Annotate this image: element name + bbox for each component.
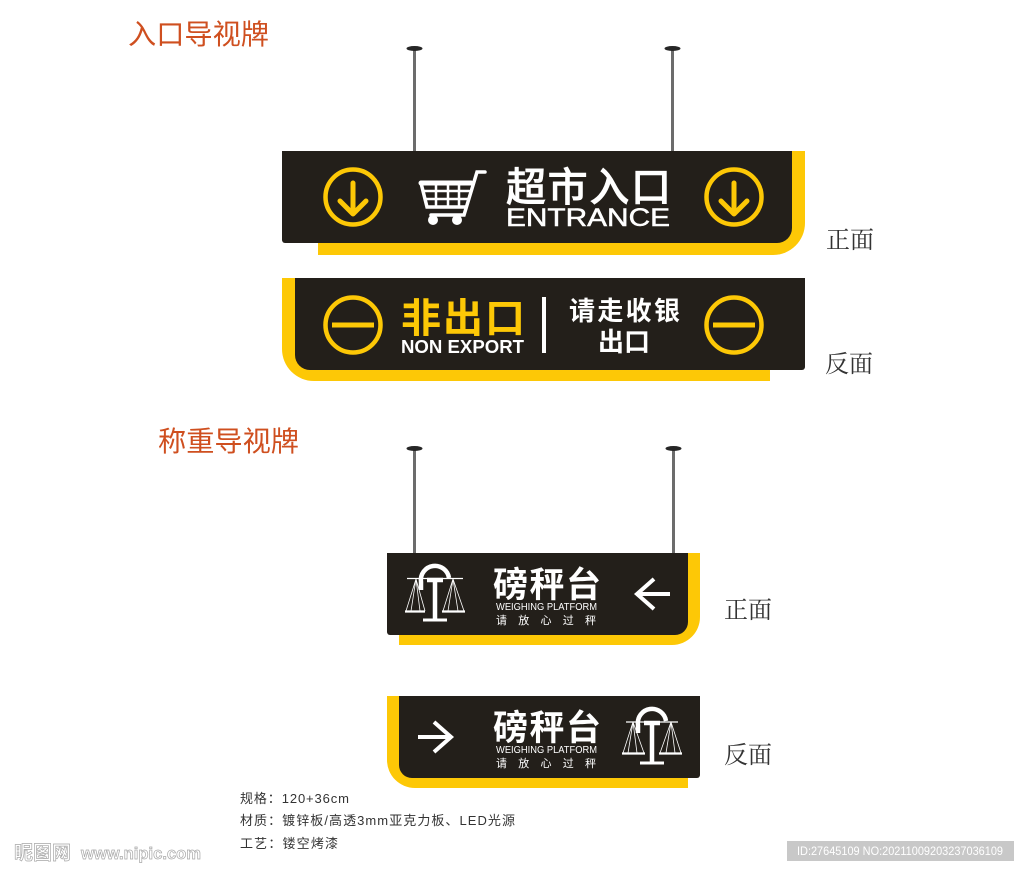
icon: down arrow circle right (706, 170, 762, 224)
icon: balance scale (405, 566, 465, 620)
icon: left arrow (637, 579, 670, 609)
panel: entrance sign front (282, 151, 805, 255)
watermark: image id bar: ID:27645109 NO:20211009203237036109 (797, 846, 1003, 858)
heading: weighing signs: 称重导视牌 (158, 420, 299, 460)
specification text: 材质：镀锌板/高透3mm亚克力板、LED光源 (240, 813, 515, 828)
icon: no entry circle left (326, 298, 380, 352)
specification text: 工艺：镂空烤漆 (240, 836, 338, 851)
watermark: site name: 昵图网 (14, 838, 71, 865)
icon: balance scale (622, 709, 682, 763)
watermark: site name: www.nipic.com (80, 845, 201, 863)
icon: shopping cart (421, 172, 485, 225)
panel: weighing sign front (387, 553, 700, 645)
hanging pole right, weighing sign (666, 446, 682, 553)
icon: down arrow circle left (326, 170, 380, 224)
instruction text: 请走收银 (569, 291, 680, 328)
icon: no entry circle right (706, 298, 762, 352)
specification text: 规格：120+36cm (240, 791, 349, 806)
hanging pole left, weighing sign (406, 446, 422, 553)
watermark: image id bar (787, 841, 1014, 861)
sign subtitle: NON EXPORT (401, 337, 524, 357)
instruction text (569, 291, 680, 359)
divider bar (542, 297, 546, 353)
sign subtitle: WEIGHING PLATFORM (496, 744, 597, 756)
instruction text: 请放心过秤 (496, 755, 596, 771)
sign subtitle: ENTRANCE (506, 204, 670, 232)
instruction text: 请放心过秤 (496, 612, 596, 628)
sign title: 超市入口 (506, 155, 671, 213)
label: back: 反面 (724, 742, 772, 769)
hanging pole left, entrance sign (406, 46, 422, 151)
panel: entrance sign back (282, 278, 805, 381)
sign title: 非出口 (401, 286, 525, 344)
sign title: 磅秤台 (493, 557, 601, 608)
panel: weighing sign back (387, 696, 700, 788)
heading: entrance signs: 入口导视牌 (128, 13, 269, 53)
watermark: site name (14, 838, 201, 865)
icon: right arrow (418, 722, 451, 752)
label: back: 反面 (825, 351, 873, 378)
label: front: 正面 (724, 597, 772, 624)
instruction text: 出口 (598, 322, 650, 359)
sign title: 磅秤台 (493, 700, 601, 751)
specification text (240, 791, 515, 851)
label: front: 正面 (826, 227, 874, 254)
sign subtitle: WEIGHING PLATFORM (496, 601, 597, 613)
hanging pole right, entrance sign (664, 46, 680, 151)
